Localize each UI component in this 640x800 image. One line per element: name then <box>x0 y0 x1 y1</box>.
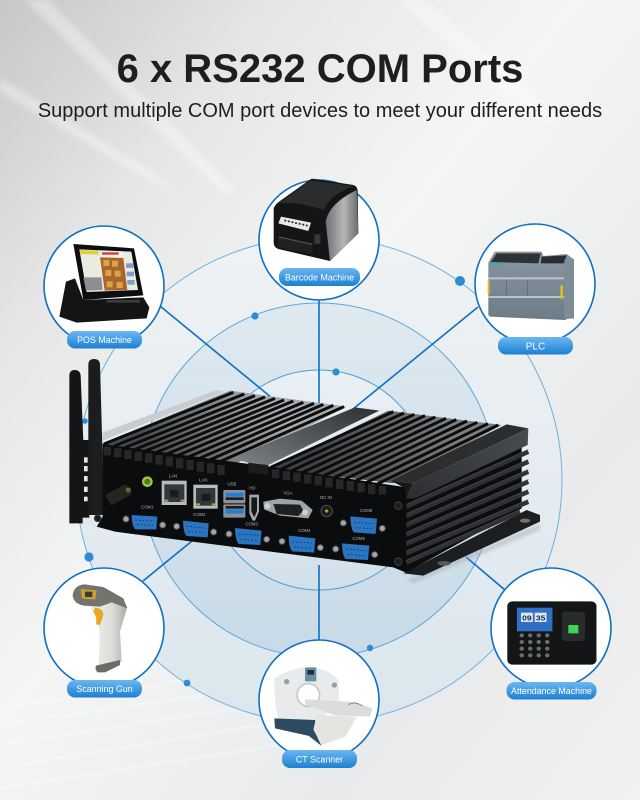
port labels: VGA <box>283 490 293 495</box>
concentric signal rings <box>76 237 562 723</box>
top fin gaps <box>103 391 502 483</box>
top fins right <box>271 412 498 484</box>
rear light edge <box>103 390 225 441</box>
device: POS machine <box>44 226 164 348</box>
label pill: Attendance Machine <box>511 686 592 696</box>
icon: CT machine <box>274 667 372 746</box>
device: barcode machine <box>259 179 379 300</box>
device: attendance machine <box>491 568 611 700</box>
label pill: Scanning Gun <box>76 684 133 694</box>
circle <box>259 640 379 760</box>
icon: PLC controller <box>488 252 574 320</box>
icon: fingerprint terminal: 09 <box>522 614 532 622</box>
port labels <box>141 473 373 541</box>
circle <box>44 568 164 688</box>
port labels: USB <box>228 481 237 486</box>
label pill: POS Machine <box>77 335 132 345</box>
device: CT scanner <box>259 640 379 768</box>
port labels: HD <box>249 485 255 490</box>
port labels: COM2 <box>193 512 206 517</box>
label pill: Barcode Machine <box>285 272 354 282</box>
port labels: DC IN <box>320 495 332 500</box>
VGA port <box>263 499 313 518</box>
subtitle: Support multiple COM port devices to meet your different needs <box>38 100 602 122</box>
port labels: COM1 <box>141 505 154 510</box>
icon: POS terminal <box>59 244 149 323</box>
front panel <box>97 444 407 573</box>
circle <box>491 568 611 688</box>
icon: barcode scanner <box>73 584 127 672</box>
HDMI port <box>249 495 259 521</box>
top slabs <box>232 407 528 498</box>
port labels: COM3 <box>245 521 259 526</box>
icon: label printer <box>274 179 358 261</box>
port labels: COM4 <box>298 528 311 533</box>
icon: fingerprint terminal: 35 <box>536 614 546 622</box>
antenna connector <box>105 484 132 505</box>
flange shadow <box>407 523 540 583</box>
mounting flange <box>403 510 540 576</box>
mini PC <box>69 359 540 583</box>
title: 6 x RS232 COM Ports <box>117 47 523 91</box>
device: scanning gun <box>44 568 164 698</box>
connector lines <box>143 286 505 640</box>
antennas <box>69 359 104 524</box>
icon: fingerprint terminal <box>507 601 596 665</box>
port labels: LAN <box>199 477 208 482</box>
power LED <box>142 476 153 487</box>
label pill: PLC <box>526 341 545 352</box>
circle <box>259 180 379 300</box>
circle <box>44 226 164 346</box>
port labels: LAN <box>169 473 177 478</box>
LAN ports <box>162 481 218 509</box>
port labels: COM5 <box>352 536 366 541</box>
COM ports <box>94 502 402 565</box>
USB ports <box>223 490 245 518</box>
device: PLC <box>475 224 595 354</box>
port labels: COM6 <box>360 508 373 513</box>
right side fins <box>405 447 528 573</box>
top fins left <box>104 392 344 463</box>
label pill: CT Scanner <box>296 754 343 764</box>
fin slots <box>104 447 386 495</box>
DC jack <box>321 505 332 517</box>
ring dots <box>82 276 465 686</box>
circle <box>475 224 595 344</box>
